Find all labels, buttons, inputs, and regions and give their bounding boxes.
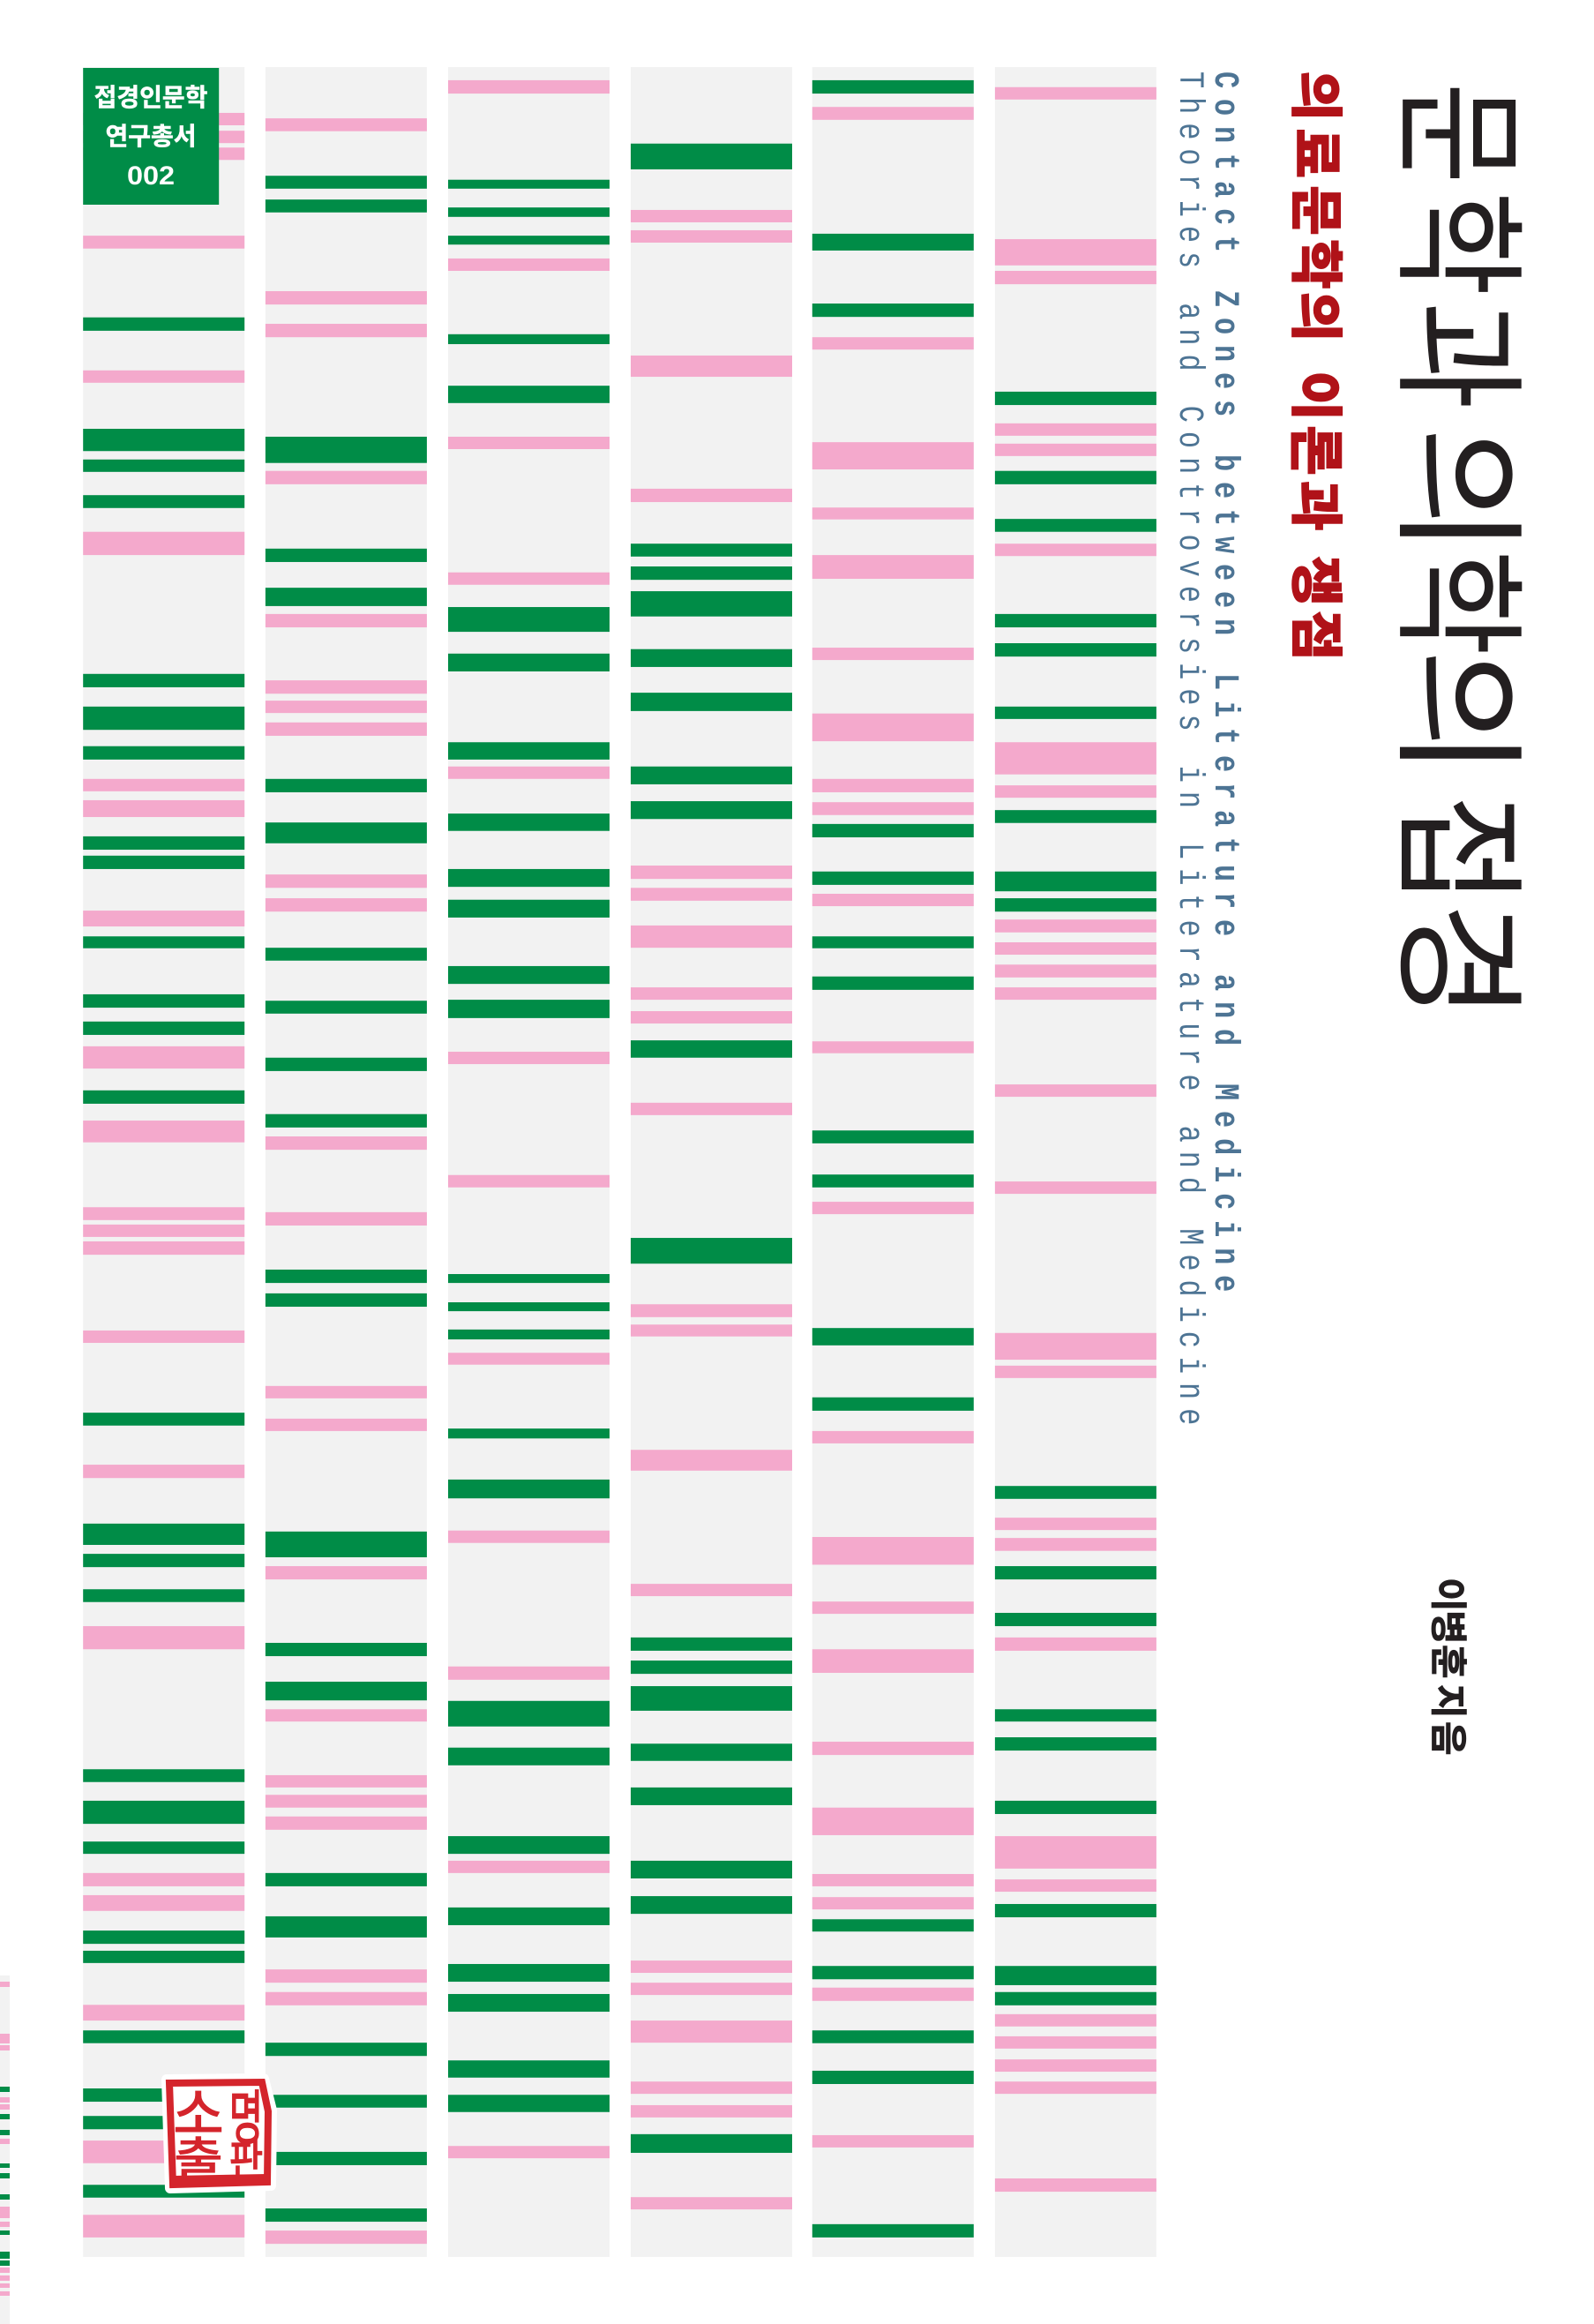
title: 학	[1382, 191, 1532, 296]
title: 문	[1381, 83, 1531, 184]
panel: barcode sliver at left edge	[0, 1975, 10, 2324]
icon: publisher seal: 판	[229, 2137, 263, 2185]
title: 경	[1381, 903, 1530, 1019]
title	[1381, 83, 1532, 1019]
panel: barcode column 6	[995, 67, 1156, 2257]
author: 이병훈지음	[1427, 1578, 1469, 1756]
title: 과	[1381, 302, 1531, 409]
title: 학	[1381, 550, 1530, 656]
panel: barcode column 3	[448, 67, 610, 2257]
icon: publisher seal: 소	[173, 2085, 224, 2146]
title: 의	[1382, 426, 1531, 555]
subtitle: 의료문학의이론과쟁점	[1286, 71, 1345, 661]
english title line 1: Contact Zones between Literature and Medicine	[1205, 71, 1245, 1302]
panel: barcode column 4	[631, 67, 792, 2257]
panel: barcode column 1	[83, 67, 244, 2257]
series badge	[83, 68, 219, 205]
series badge: 002	[127, 161, 175, 191]
title: 접	[1381, 795, 1530, 904]
english title line 2: Theories and Controversies in Literature and Medicine	[1170, 71, 1209, 1434]
panel: barcode column 2	[266, 67, 427, 2257]
title: 의	[1382, 648, 1531, 777]
icon: publisher seal: 출	[174, 2133, 223, 2185]
series badge: 연구총서	[105, 123, 197, 150]
icon: publisher seal	[167, 2079, 272, 2188]
panel: barcode column 5	[812, 67, 974, 2257]
series badge: 접경인문학	[94, 84, 207, 111]
icon: publisher seal: 명	[229, 2086, 263, 2151]
